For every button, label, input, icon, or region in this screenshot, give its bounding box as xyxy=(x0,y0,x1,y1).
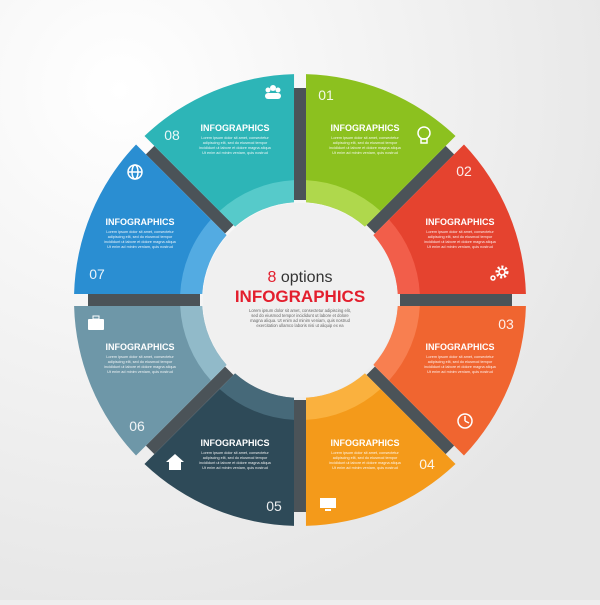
segment texts: incididunt ut labore et dolore magna aliqua xyxy=(199,146,272,150)
segment texts: Ut enim ad minim veniam, quis nostrud xyxy=(107,370,173,374)
icon: house xyxy=(166,454,184,470)
icon: globe xyxy=(128,165,142,179)
center circle xyxy=(203,203,397,397)
segment texts: Ut enim ad minim veniam, quis nostrud xyxy=(202,466,268,470)
segment texts: INFOGRAPHICS xyxy=(105,342,175,352)
segment texts: INFOGRAPHICS xyxy=(330,123,400,133)
segment texts: incididunt ut labore et dolore magna aliqua xyxy=(329,146,402,150)
icon: clock xyxy=(458,414,472,428)
center title: magna aliqua. Ut enim ad minim veniam, quis nostrud xyxy=(250,318,351,323)
segment texts: INFOGRAPHICS xyxy=(330,438,400,448)
segment 03 xyxy=(373,306,526,456)
segment texts: incididunt ut labore et dolore magna aliqua xyxy=(424,240,497,244)
segment texts xyxy=(104,123,497,470)
segment texts: Ut enim ad minim veniam, quis nostrud xyxy=(332,151,398,155)
icon: people xyxy=(265,85,281,99)
segment texts: Ut enim ad minim veniam, quis nostrud xyxy=(332,466,398,470)
center title: exercitation ullamco laboris nisi ut aliquip ex ea xyxy=(256,323,344,328)
segment texts: adipiscing elit, sed do eiusmod tempor xyxy=(333,141,398,145)
segment texts: INFOGRAPHICS xyxy=(200,438,270,448)
center title: 8 options xyxy=(268,269,332,286)
segment texts: incididunt ut labore et dolore magna aliqua xyxy=(199,461,272,465)
numbers: 04 xyxy=(419,456,435,472)
numbers xyxy=(89,87,514,514)
center title: Lorem ipsum dolor sit amet, consectetur adipiscing elit, xyxy=(249,308,351,313)
segment texts: INFOGRAPHICS xyxy=(425,217,495,227)
segment texts: Lorem ipsum dolor sit amet, consectetur xyxy=(106,230,174,234)
segment texts: INFOGRAPHICS xyxy=(105,217,175,227)
icon: gear xyxy=(491,267,507,280)
gap bars xyxy=(88,88,512,512)
center title: sed do eiusmod tempor incididunt ut labore et dolore xyxy=(251,313,349,318)
center title: INFOGRAPHICS xyxy=(235,287,365,306)
segment texts: incididunt ut labore et dolore magna aliqua xyxy=(424,365,497,369)
numbers: 07 xyxy=(89,266,105,282)
segment 04 xyxy=(242,356,456,570)
numbers: 05 xyxy=(266,498,282,514)
segment texts: adipiscing elit, sed do eiusmod tempor xyxy=(428,235,493,239)
segment texts: Ut enim ad minim veniam, quis nostrud xyxy=(107,245,173,249)
center title xyxy=(235,269,365,328)
segment texts: Lorem ipsum dolor sit amet, consectetur xyxy=(331,451,399,455)
segment texts: Lorem ipsum dolor sit amet, consectetur xyxy=(201,136,269,140)
segment 01 xyxy=(306,74,456,227)
segment texts: adipiscing elit, sed do eiusmod tempor xyxy=(108,235,173,239)
numbers: 02 xyxy=(456,163,472,179)
icon: bulb xyxy=(418,127,430,143)
numbers: 03 xyxy=(498,316,514,332)
segment texts: incididunt ut labore et dolore magna aliqua xyxy=(329,461,402,465)
segment texts: incididunt ut labore et dolore magna aliqua xyxy=(104,240,177,244)
segment texts: Lorem ipsum dolor sit amet, consectetur xyxy=(106,355,174,359)
segment texts: INFOGRAPHICS xyxy=(200,123,270,133)
segment texts: incididunt ut labore et dolore magna aliqua xyxy=(104,365,177,369)
segment texts: adipiscing elit, sed do eiusmod tempor xyxy=(428,360,493,364)
segment texts: INFOGRAPHICS xyxy=(425,342,495,352)
segment 08 xyxy=(144,30,358,244)
segment texts: Ut enim ad minim veniam, quis nostrud xyxy=(202,151,268,155)
segment texts: Lorem ipsum dolor sit amet, consectetur xyxy=(426,230,494,234)
numbers: 08 xyxy=(164,127,180,143)
icons xyxy=(88,85,507,511)
icon: briefcase xyxy=(88,316,104,330)
segment 05 xyxy=(144,373,294,526)
segment texts: adipiscing elit, sed do eiusmod tempor xyxy=(333,456,398,460)
segment texts: Ut enim ad minim veniam, quis nostrud xyxy=(427,370,493,374)
numbers: 01 xyxy=(318,87,334,103)
segment 07 xyxy=(74,144,227,294)
segment texts: Lorem ipsum dolor sit amet, consectetur xyxy=(426,355,494,359)
segment texts: adipiscing elit, sed do eiusmod tempor xyxy=(203,141,268,145)
segment 06 xyxy=(30,242,244,456)
segment texts: Lorem ipsum dolor sit amet, consectetur xyxy=(201,451,269,455)
icon: monitor xyxy=(320,498,336,511)
segment texts: adipiscing elit, sed do eiusmod tempor xyxy=(203,456,268,460)
segment texts: Lorem ipsum dolor sit amet, consectetur xyxy=(331,136,399,140)
segment texts: adipiscing elit, sed do eiusmod tempor xyxy=(108,360,173,364)
segment texts: Ut enim ad minim veniam, quis nostrud xyxy=(427,245,493,249)
numbers: 06 xyxy=(129,418,145,434)
segment 02 xyxy=(356,144,570,358)
